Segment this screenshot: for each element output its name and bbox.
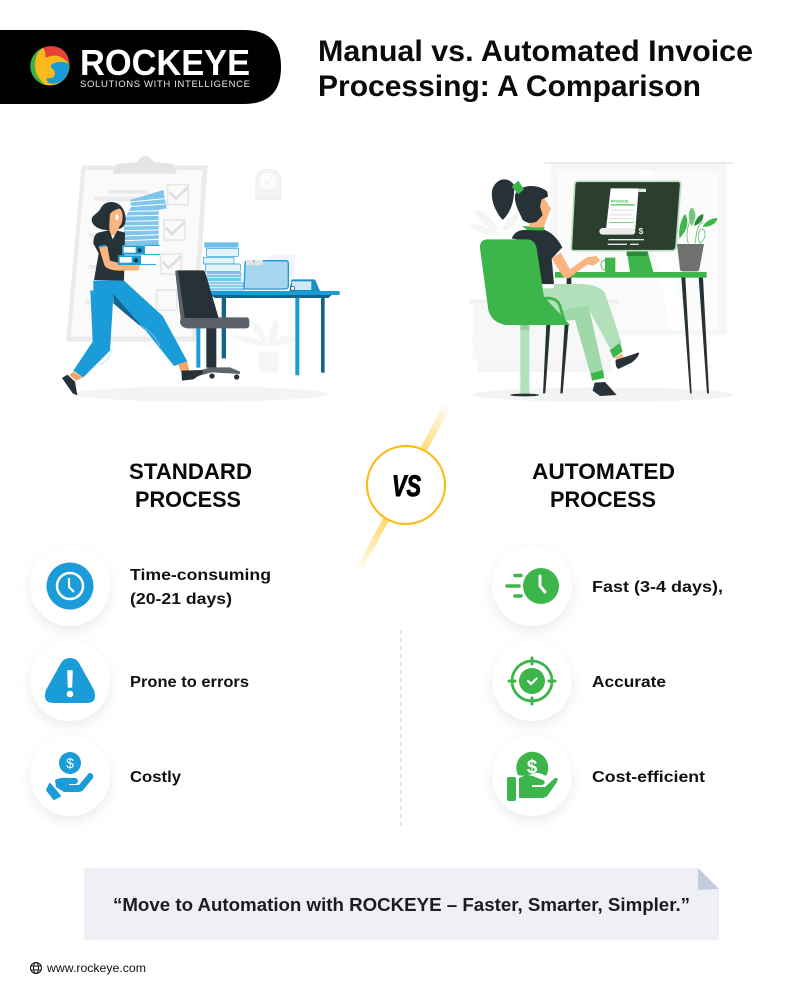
item: prone to errors: Prone to errors [130,674,249,691]
window [544,162,733,335]
desk paper stack [203,242,244,291]
folder on desk [244,255,294,289]
motion lines [99,325,160,365]
invoice document [599,188,646,245]
floor shadow [472,387,732,402]
hair back [92,202,126,230]
item: cost-efficient: $ [527,757,538,778]
arm [552,253,600,278]
mug [601,258,615,272]
face and neck [108,207,123,235]
item: prone to errors [30,641,249,721]
desk calendar [289,279,320,291]
heading: standard process [129,459,252,512]
item: accurate [492,641,666,721]
office chair [175,270,249,380]
heading: automated process: PROCESS [550,487,656,512]
item: costly: $ [66,755,74,771]
rear leg [73,290,113,377]
floor shadow [74,386,329,402]
item: time-consuming [30,546,271,626]
torso [512,229,562,284]
vs badge [356,403,451,572]
title [318,35,753,103]
wall clock [256,169,281,199]
item: costly: Costly [130,769,181,786]
green chair [480,239,570,396]
illustration: woman using invoice software [461,153,742,402]
desk [196,291,340,375]
heading: automated process: AUTOMATED [532,459,675,484]
item: cost-efficient [492,736,705,816]
clipboard [66,156,208,342]
footer: website: www.rockeye.com [46,961,146,975]
heading: automated process [532,459,675,512]
title: Manual vs. Automated Invoice [318,35,753,68]
seated woman [492,179,639,396]
monitor [571,181,681,272]
illustration: woman carrying stacks of files [30,153,367,402]
shirt [93,230,125,281]
callout: closing quote: “Move to Automation with ROCKEYE – Faster, Smarter, Simpler.” [113,895,690,915]
binders [118,245,160,265]
potted plant [232,317,300,372]
icon: globe [30,962,42,974]
invoice document: INVOICE [611,199,629,203]
heading: standard process: PROCESS [135,487,241,512]
item: costly [30,736,181,816]
logo banner: ROCKEYE [80,42,250,83]
trousers [543,284,622,348]
hair [515,186,548,223]
arm [99,246,140,271]
neck and face [527,197,551,227]
logo banner [0,30,281,104]
icon: swirl logo [30,46,69,86]
shoes [616,352,639,369]
item: accurate: Accurate [592,674,666,691]
title: Processing: A Comparison [318,70,701,103]
vs badge: VS [392,470,421,503]
item: fast: Fast (3-4 days), [592,579,723,596]
item: fast [492,546,723,626]
background shelf and plant [469,209,619,372]
heading: standard process: STANDARD [129,459,252,484]
panel: automated process list [492,546,723,816]
logo banner: SOLUTIONS WITH INTELLIGENCE [80,79,250,90]
front leg [93,280,187,366]
item: cost-efficient: Cost-efficient [592,769,705,786]
desk [555,272,709,393]
callout: closing quote [84,868,719,940]
shoes [62,375,77,395]
carried paper stack [124,190,167,245]
item: time-consuming: (20-21 days) [130,591,232,608]
desk plant [677,207,718,271]
woman with files [62,190,203,395]
item: time-consuming: Time-consuming [130,567,271,584]
panel: standard process list [30,546,271,816]
invoice document: $ [639,226,644,236]
